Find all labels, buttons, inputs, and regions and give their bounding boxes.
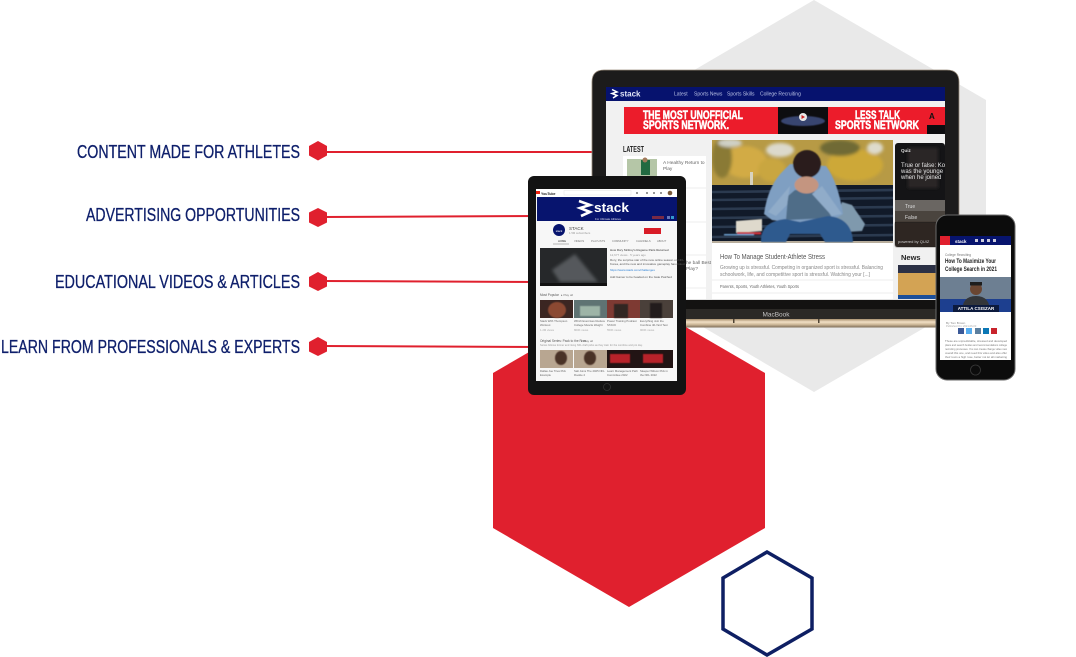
site nav bar: Sports News <box>694 92 723 98</box>
most popular row: ▸ Play all <box>561 293 573 297</box>
mobile body text: These are unpredictable, stressed and developed <box>945 339 1007 343</box>
most popular row: STACK <box>607 323 616 327</box>
most popular row: 550K views <box>607 328 622 332</box>
original series row: Series follows former and rising NFL draft picks as they train for the combine and pro day. <box>540 343 643 347</box>
channel header: PLAYLISTS <box>591 239 605 243</box>
quiz panel: Quiz <box>901 148 911 153</box>
mobile article heading: How To Maximize Your <box>945 259 997 265</box>
original series row: Rookie 2 <box>574 373 585 377</box>
featured video description: Add Gamer to be headed on the Gate Paiched <box>610 275 672 279</box>
featured video description: https://www.stack.com/challenges <box>610 268 655 272</box>
most popular row: Stack With Thompson <box>540 319 568 323</box>
mobile body text: their tours a high rose, better not let all marketing <box>945 355 1007 359</box>
original series row: the NFL 2022 <box>640 373 657 377</box>
macbook label: MacBook <box>762 312 790 318</box>
original series row: ▸ Play all <box>581 339 593 343</box>
hero article text: How To Manage Student-Athlete Stress <box>720 254 825 261</box>
featured video description: 12,677 views · 5 years ago <box>610 253 646 257</box>
site nav bar <box>606 87 945 101</box>
channel header <box>553 224 667 244</box>
advert banner <box>624 107 945 134</box>
quiz panel: powered by QUIZ <box>898 239 930 244</box>
most popular row: 800K views <box>574 328 589 332</box>
channel header: STACK <box>569 226 584 231</box>
phone body <box>936 215 1015 380</box>
mobile body text: plans and search bodies and recommendations college <box>945 343 1007 347</box>
original series row <box>540 339 673 377</box>
advert banner: LESS TALK <box>855 110 900 122</box>
background hexagon: grey <box>643 0 986 392</box>
site nav bar: Sports Skills <box>727 92 755 98</box>
most popular row: Which Exercises Reduce <box>574 319 606 323</box>
latest article list: Play? <box>686 266 698 272</box>
feature: learn from professionals and experts: LEARN FROM PROFESSIONALS & EXPERTS <box>1 337 300 357</box>
channel header: VIDEOS <box>574 239 584 243</box>
original series row: Salt Joins The 2025 NFL <box>574 369 605 373</box>
latest heading: LATEST <box>623 145 644 154</box>
tablet body <box>528 176 686 395</box>
featured video description: Korea, and the new and innovative gameplay has risked. <box>610 262 686 266</box>
hero article text: schoolwork, life, and competitive sport is stressful. Watching your [...] <box>720 272 871 278</box>
hero article text <box>712 243 893 299</box>
background hexagon: red <box>493 294 765 607</box>
device: tablet <box>528 176 686 395</box>
laptop bezel <box>592 70 959 300</box>
mobile byline and social: By Tom Brown <box>946 321 966 325</box>
featured video <box>540 248 607 286</box>
channel header: HOME <box>558 239 566 243</box>
laptop screen <box>606 87 946 299</box>
most popular row: Everything Join the <box>640 319 664 323</box>
quiz panel: False <box>905 215 917 221</box>
quiz panel: was the younge <box>900 169 944 175</box>
original series row: Learn Management Path <box>607 369 638 373</box>
feature: content made for athletes: CONTENT MADE FOR ATHLETES <box>77 142 300 162</box>
most popular row: 1.2M views <box>540 328 555 332</box>
original series row: Committee 2022 <box>607 373 628 377</box>
mobile article heading: College Search in 2021 <box>945 267 998 273</box>
most popular row: Workout <box>540 323 551 327</box>
youtube top bar <box>536 189 677 197</box>
phone home button <box>970 365 980 375</box>
hero photo: stressed athlete on bench <box>712 138 893 243</box>
outline hexagon: navy <box>723 552 812 655</box>
youtube top bar: YouTube <box>541 192 556 196</box>
most popular row: College Muscle Weight <box>574 323 603 327</box>
featured video description: How Rory Mcilroy's Regame Paris Returned <box>610 248 669 252</box>
most popular row: 900K views <box>640 328 655 332</box>
feature: educational videos and articles <box>55 272 540 292</box>
quiz panel: True <box>905 204 915 210</box>
site nav bar: College Recruiting <box>760 92 801 98</box>
quiz panel: when he joined <box>900 175 941 181</box>
original series row: Dallas Joe Tries Pick <box>540 369 567 373</box>
site nav bar: Latest <box>674 92 688 98</box>
hero article text: Parents, Sports, Youth Athletes, Youth Sports <box>720 284 799 290</box>
hero article text: Growing up is stressful. Competing in organized sport is stressful. Balancing <box>720 265 883 271</box>
original series row: Example <box>540 373 551 377</box>
feature: educational videos and articles: EDUCATIONAL VIDEOS & ARTICLES <box>55 272 300 292</box>
device: smartphone <box>936 215 1015 380</box>
mobile body text <box>945 339 1008 359</box>
quiz panel: True or false: Ko <box>901 163 946 169</box>
mobile article heading: College Recruiting <box>945 253 971 257</box>
featured video description <box>610 248 686 279</box>
advert banner: SPORTS NETWORK. <box>643 120 729 132</box>
news photo: basketball court <box>898 265 936 299</box>
channel header: stack <box>556 229 563 233</box>
laptop hinge and base <box>592 299 959 328</box>
device: laptop <box>592 70 959 328</box>
channel banner <box>537 197 677 221</box>
most popular row: Most Popular <box>540 293 560 297</box>
feature: content made for athletes <box>77 141 600 162</box>
site nav bar: stack <box>620 90 641 98</box>
youtube page <box>536 189 686 381</box>
channel header: COMMUNITY <box>612 239 629 243</box>
channel header: CHANNELS <box>636 239 651 243</box>
advert banner: THE MOST UNOFFICIAL <box>643 110 743 122</box>
mobile body text: recruiting processes. You can create change video new <box>945 347 1008 351</box>
feature: advertising opportunities <box>86 205 540 227</box>
latest article list: Play <box>663 166 673 172</box>
advert banner: SPORTS NETWORK <box>835 120 920 132</box>
quiz panel <box>895 143 946 247</box>
feature list <box>1 141 600 357</box>
news heading: News <box>901 253 921 262</box>
mobile byline and social: Published On: 2021-06-03 <box>946 324 977 328</box>
mobile byline and social <box>946 321 997 334</box>
channel header: ABOUT <box>657 239 667 243</box>
mobile nav: stack <box>955 239 967 244</box>
channel banner: stack <box>594 200 630 215</box>
latest article list: A Healthy Return to <box>663 160 705 166</box>
latest article list <box>623 156 712 299</box>
featured video description: Rory, the surprise star of the new online season on NFL <box>610 258 684 262</box>
latest article list: he ball Best <box>686 260 712 266</box>
most popular row: Combine 40-Yard Test <box>640 323 668 327</box>
feature: advertising opportunities: ADVERTISING OPPORTUNITIES <box>86 205 300 225</box>
advert banner: A <box>929 112 935 121</box>
original series row: Original Series: Pack to the Pros <box>540 339 586 343</box>
phone web page <box>940 236 1011 360</box>
most popular row: Power Training Podcast <box>607 319 637 323</box>
original series row: Sleeper Wilson Pick in <box>640 369 668 373</box>
channel banner: For Ultimate Athletes <box>595 217 622 221</box>
channel header: 1.5M subscribers <box>569 231 591 235</box>
mobile body text: overall this one, and need this video and also offer <box>945 351 1007 355</box>
mobile video still: ATTILA CSISZAR <box>958 306 995 311</box>
mobile article heading <box>945 253 998 273</box>
tablet home button <box>604 384 610 390</box>
most popular row <box>540 293 673 332</box>
